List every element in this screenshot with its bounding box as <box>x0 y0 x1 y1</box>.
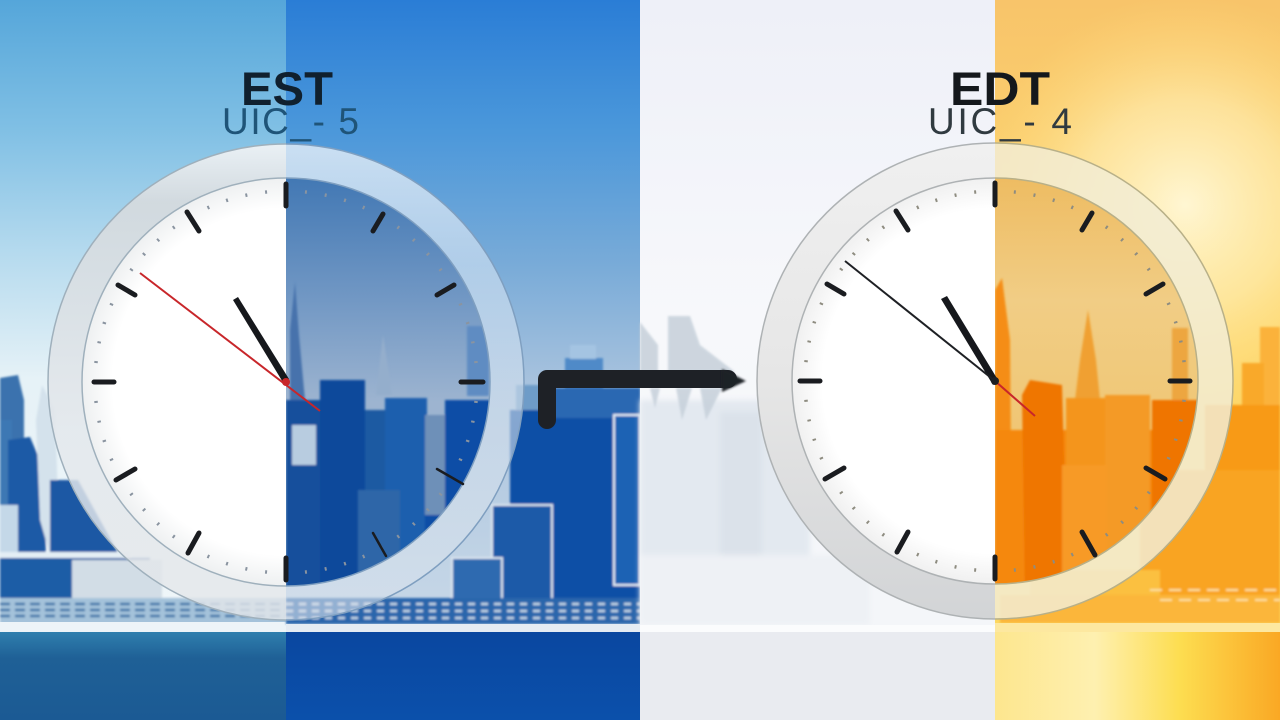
skyline: deep panel <box>286 345 640 624</box>
heading: EST: EST <box>241 62 333 115</box>
glass ring left <box>47 143 286 621</box>
hour hand <box>233 297 289 384</box>
dial: EST white side <box>82 178 286 586</box>
second hand tail <box>995 381 1035 416</box>
dial: EST blue side <box>286 178 490 586</box>
label: UTC-4: UIC_- 4 <box>928 101 1072 142</box>
panel: EDT orange half <box>995 0 1280 720</box>
hour hand <box>941 296 998 385</box>
arrow ghost buildings <box>640 316 735 420</box>
hour ticks <box>94 184 483 580</box>
panel: EDT white half <box>640 0 995 720</box>
label: UTC-5: UIC_- 5 <box>222 101 359 142</box>
skyline: light panel <box>0 375 286 624</box>
minute ticks <box>805 191 1185 571</box>
dial: EDT orange side <box>995 178 1197 584</box>
heading: EDT: EDT <box>950 62 1050 115</box>
clock: EDT <box>757 143 1233 619</box>
dial: EDT white side <box>792 178 995 584</box>
panel: EST light blue half <box>0 0 286 720</box>
glass ring right <box>995 142 1234 620</box>
hub <box>991 377 999 385</box>
second hand <box>845 261 995 381</box>
clock: EST <box>48 144 524 620</box>
second hand <box>140 273 320 411</box>
panel: EST deep blue half <box>286 0 640 720</box>
skyline: orange panel <box>1000 327 1280 623</box>
hour ticks <box>800 183 1190 579</box>
arrow: EST to EDT <box>547 369 746 420</box>
hub <box>282 378 290 386</box>
glass ring right <box>286 143 525 621</box>
glass ring left <box>756 142 995 620</box>
minute ticks <box>95 191 477 573</box>
skyline: pale panel <box>640 400 870 625</box>
